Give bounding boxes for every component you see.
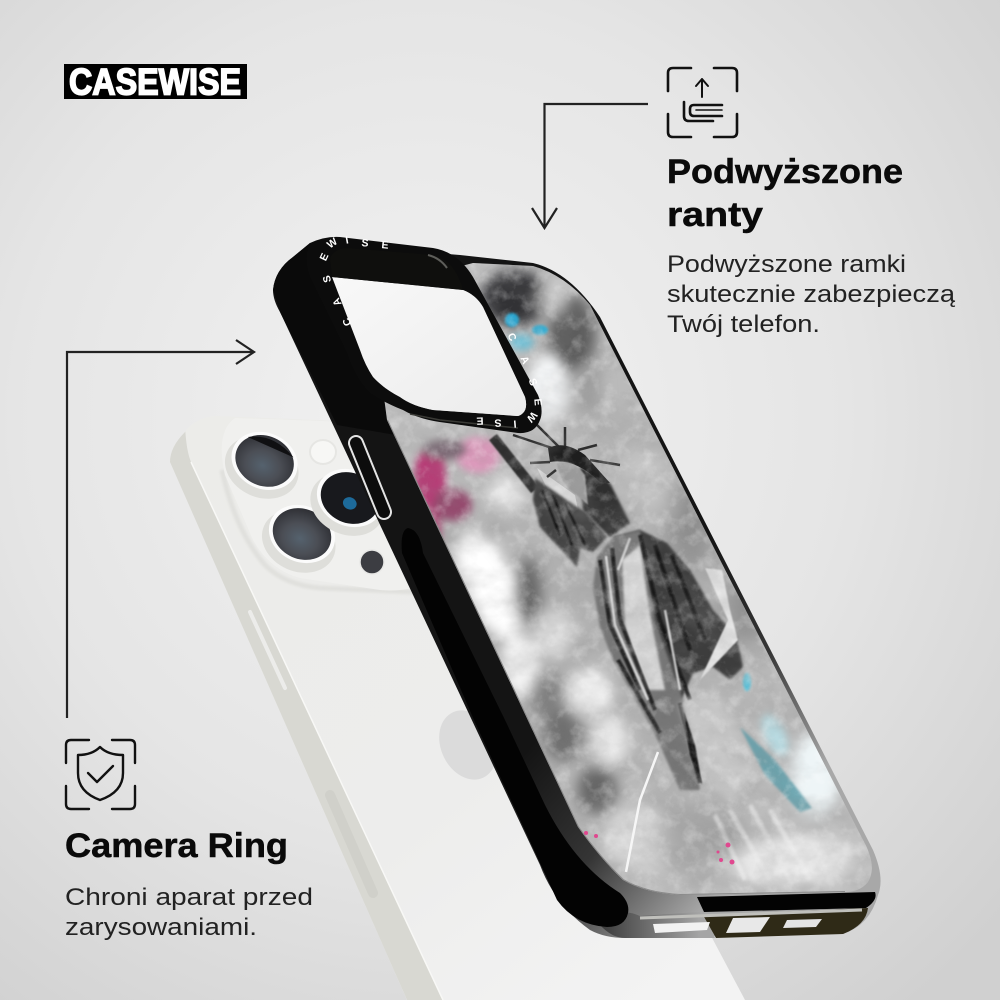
- ring lettering: W: [524, 409, 539, 424]
- robe lower drape: [680, 690, 760, 803]
- robe right dark: [612, 528, 744, 700]
- ring lettering: I: [513, 417, 517, 430]
- icon: raised edges: [668, 68, 737, 137]
- brush streaks lower right: [712, 804, 789, 880]
- text: camera ring description: Chroni aparat przed: [65, 884, 313, 911]
- ring lower edge highlight: [410, 414, 518, 428]
- cyan splash upper: [505, 313, 548, 350]
- bottom edge with ports: [600, 892, 876, 938]
- side button upper: [250, 612, 285, 688]
- dark and white texture: [386, 264, 870, 894]
- robe light drape: [622, 545, 665, 690]
- ring body: [306, 237, 542, 433]
- lidar sensor: [360, 550, 384, 574]
- side button: [356, 443, 384, 512]
- ring lettering: S: [494, 416, 502, 429]
- ring lettering: I: [345, 234, 350, 247]
- black case: [273, 243, 881, 938]
- right gray background: [620, 450, 759, 869]
- ring lettering: C: [340, 315, 354, 328]
- text: raised edges description: Twój telefon.: [667, 311, 820, 338]
- art base: [382, 263, 872, 895]
- hair: [580, 467, 630, 537]
- camera window: [332, 277, 526, 416]
- statue figure: [493, 423, 760, 803]
- heading: Podwyższone ranty: ranty: [667, 196, 763, 234]
- side pill recess: [402, 528, 628, 927]
- pink specks: [584, 831, 734, 864]
- camera plateau: [224, 470, 406, 590]
- case artwork: Statue of Liberty: [382, 263, 872, 895]
- cyan splash lower: [740, 673, 812, 812]
- text: raised edges description: Podwyższone ramki: [667, 251, 906, 278]
- lens 1: [225, 432, 298, 499]
- crown band: [548, 445, 610, 483]
- tablet and arm light: [700, 568, 738, 680]
- arrow: top callout to case edge: [532, 104, 648, 228]
- light gap beside arm: [537, 468, 578, 510]
- case frame: [273, 243, 881, 938]
- white phone back: [160, 410, 760, 1000]
- phone face: [367, 803, 745, 1000]
- ring lettering: S: [321, 274, 334, 284]
- sleeve: [533, 478, 607, 567]
- text: camera ring description: zarysowaniami.: [65, 914, 257, 941]
- ring lettering: W: [325, 236, 340, 251]
- icon: shield with check: [66, 740, 135, 809]
- robe stripes: [600, 535, 705, 783]
- face: [557, 462, 588, 505]
- ring lettering: [318, 234, 544, 430]
- lens 2: [262, 505, 336, 573]
- crown spikes: [513, 423, 620, 477]
- robe left: [593, 530, 700, 790]
- ring lettering: E: [381, 239, 389, 252]
- arrow: bottom callout to camera ring: [67, 340, 254, 718]
- light and dark clouds: [443, 479, 854, 884]
- apple logo: [439, 710, 494, 780]
- heading: Camera Ring: Camera Ring: [65, 827, 288, 865]
- dark top hatch: [481, 270, 596, 375]
- heading: Podwyższone ranty: Podwyższone: [667, 153, 903, 191]
- ring lettering: S: [361, 237, 369, 250]
- camera plateau shadow: [222, 470, 415, 592]
- ring lettering: C: [505, 331, 519, 344]
- ring lettering: A: [330, 295, 344, 308]
- text: raised edges description: skutecznie zabezpieczą: [667, 281, 956, 308]
- ring lettering: E: [318, 251, 331, 263]
- inner bevel: [330, 248, 463, 290]
- side button lower: [330, 795, 373, 893]
- art left edge highlight: [387, 420, 845, 895]
- light cloud right of ring: [524, 346, 605, 428]
- sleeve folds: [542, 490, 585, 545]
- camera ring: [306, 234, 544, 433]
- ring lettering: E: [476, 414, 484, 427]
- phone side edge: [165, 425, 443, 1000]
- pink splash: [414, 437, 500, 552]
- ring lettering: E: [531, 398, 544, 406]
- flash: [310, 440, 336, 464]
- frame dark upper section: [273, 243, 425, 440]
- bevel highlight: [428, 255, 447, 268]
- side edge highlight: [191, 462, 443, 1000]
- raised arm: [493, 437, 535, 490]
- logo: CASEWISE: CASEWISE: [69, 62, 241, 102]
- ring lettering: S: [526, 377, 539, 388]
- white crack: [626, 752, 658, 872]
- ring lettering: A: [518, 354, 532, 367]
- lens 3: [310, 469, 380, 536]
